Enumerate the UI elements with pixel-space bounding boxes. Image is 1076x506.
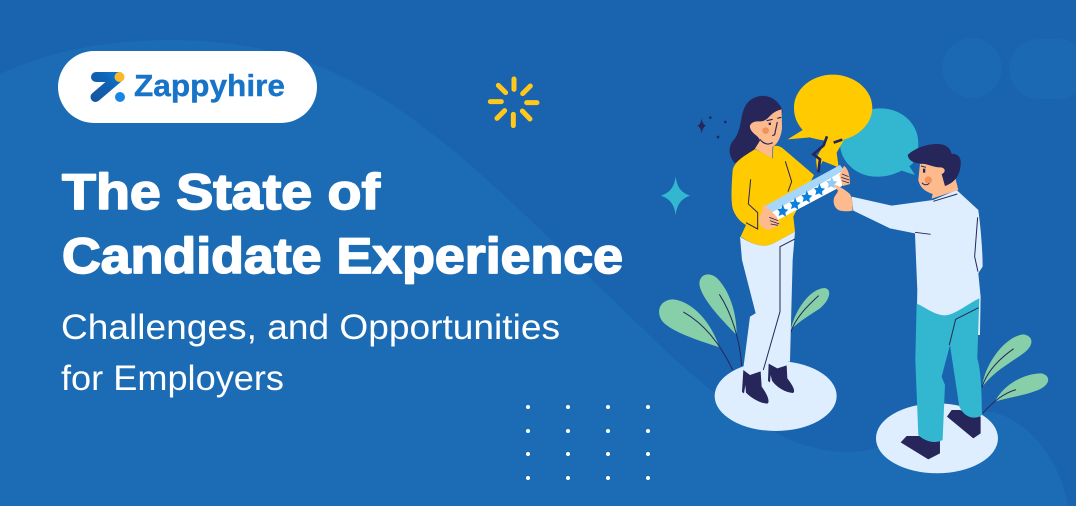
- subtitle: Challenges, and Opportunities: [61, 308, 560, 347]
- plants: [659, 274, 1048, 413]
- woman's face and neck: [750, 109, 782, 159]
- title: Candidate Experience: [62, 228, 623, 284]
- logo wordmark: Zappyhire: [134, 68, 285, 103]
- icon: teal sparkle: [661, 177, 690, 215]
- man's hand pointing: [833, 184, 853, 211]
- woman's hair: [730, 96, 783, 163]
- subtitle: [61, 308, 560, 398]
- woman's trousers: [740, 232, 795, 375]
- man's white shirt: [852, 190, 983, 335]
- illustration: upper scene: [661, 75, 983, 335]
- illustration: lower scene: [659, 274, 1048, 473]
- teal speech bubble: [840, 108, 918, 177]
- dot grid: [526, 405, 650, 480]
- icon: yellow sunburst: [490, 79, 537, 126]
- man's hair: [908, 144, 961, 186]
- background circles: [942, 38, 1076, 99]
- man's trousers: [915, 298, 982, 442]
- woman's hands: [759, 166, 850, 230]
- icon: dark sparkle and dots: [697, 116, 727, 138]
- yellow speech bubble: [788, 75, 872, 141]
- woman's boots: [742, 364, 794, 404]
- man's head: [908, 144, 961, 199]
- logo pill: [58, 51, 317, 123]
- platform ellipses: [715, 361, 998, 473]
- title: The State of: [62, 164, 380, 220]
- rating card: [766, 165, 844, 221]
- yellow star: [813, 136, 844, 172]
- subtitle: for Employers: [61, 359, 284, 398]
- man's shoes: [901, 410, 981, 459]
- title: [62, 164, 623, 284]
- rating stars: [777, 176, 837, 217]
- woman's yellow sweater: [732, 146, 814, 246]
- icon: logo mark: [96, 72, 125, 102]
